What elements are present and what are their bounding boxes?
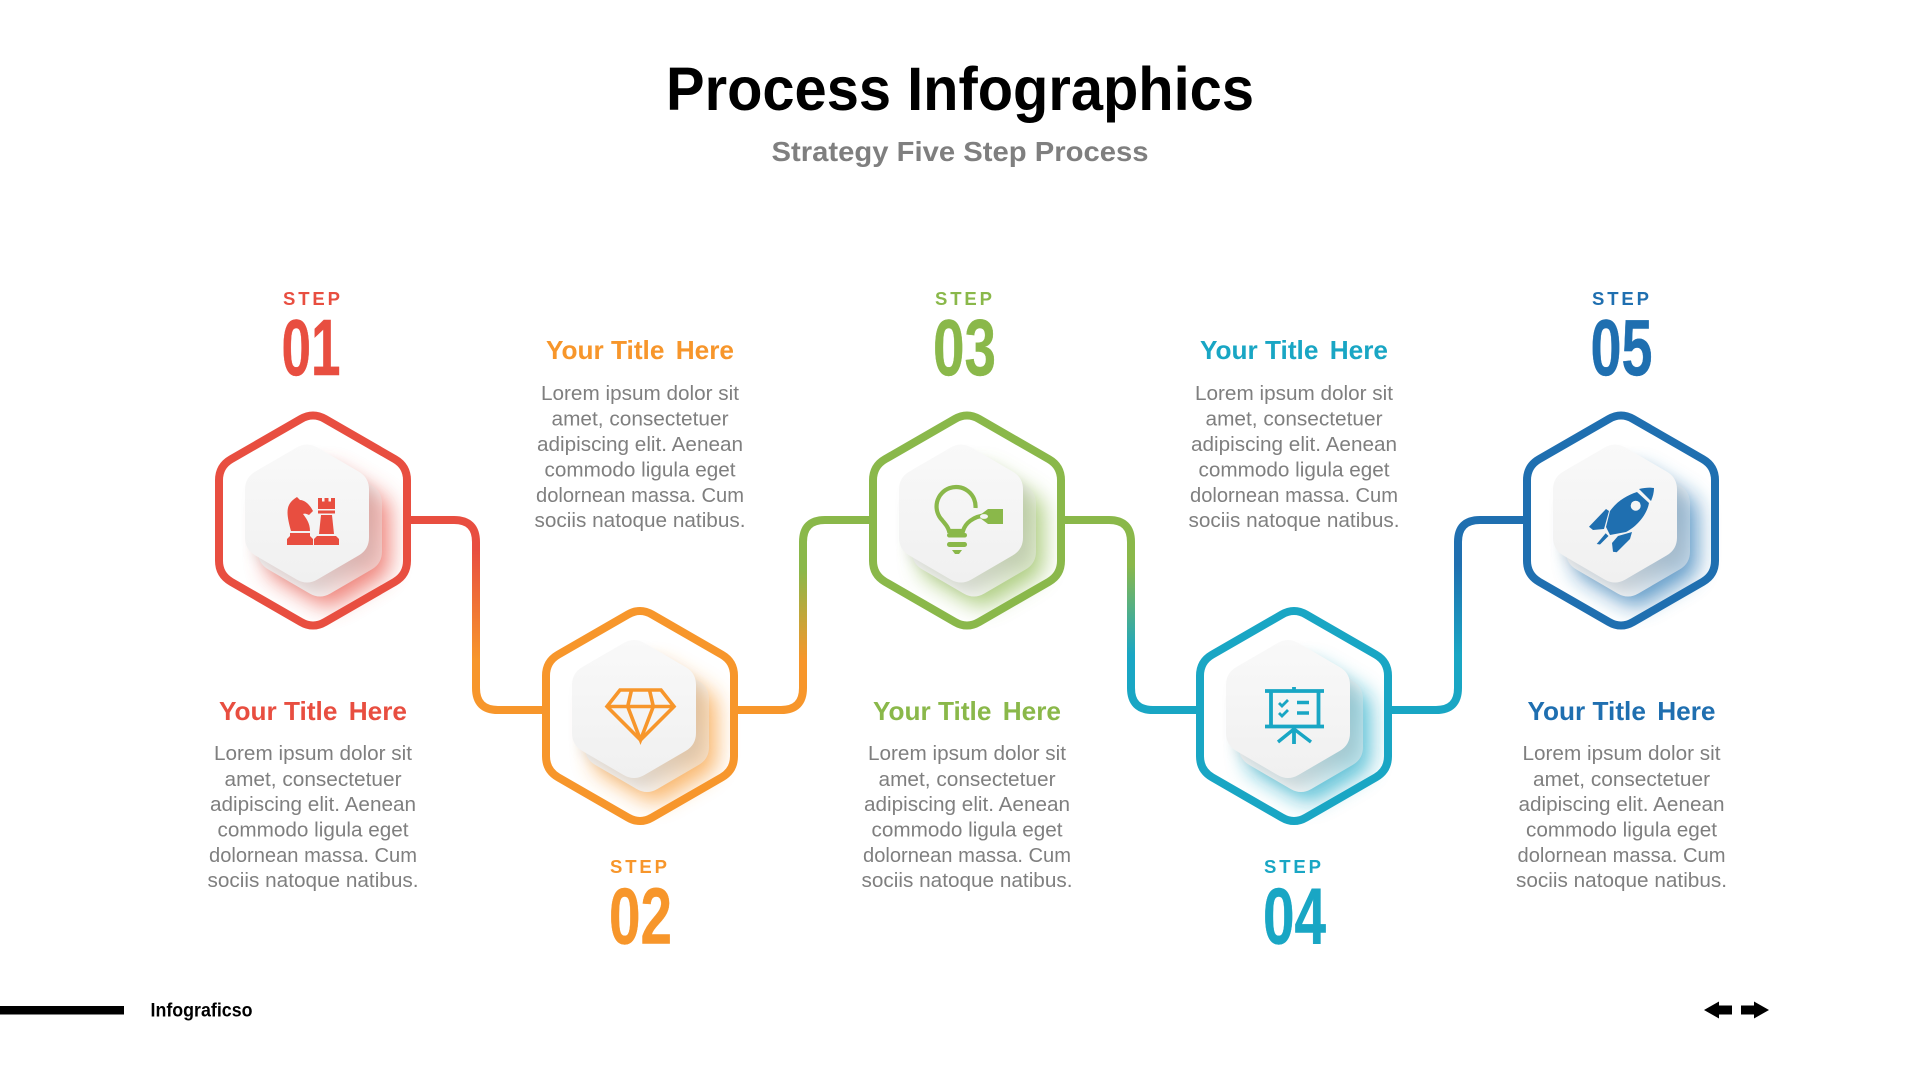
panel: step 4 xyxy=(1188,335,1400,960)
text block 4: dolornean massa. Cum xyxy=(1190,485,1398,507)
text block 4: commodo ligula eget xyxy=(1198,460,1390,482)
connector: step 1 to step 2 xyxy=(405,520,550,710)
text block 4: amet, consectetuer xyxy=(1206,408,1383,430)
hexagon 4 xyxy=(1200,611,1388,821)
icon: light bulb with tag xyxy=(937,487,1003,554)
text block 5: commodo ligula eget xyxy=(1526,820,1717,842)
text block 2: amet, consectetuer xyxy=(552,408,729,430)
panel: step 2 xyxy=(534,335,746,960)
text block 2 xyxy=(534,383,746,532)
text block 1: commodo ligula eget xyxy=(218,820,409,842)
footer brand: Infograficso xyxy=(150,1000,252,1022)
text block 1: amet, consectetuer xyxy=(224,769,402,791)
text block 1: adipiscing elit. Aenean xyxy=(210,794,416,816)
text block 3 xyxy=(862,743,1072,892)
step number 02: 02 xyxy=(609,872,672,960)
footer bar xyxy=(0,1006,124,1014)
connector: step 2 to step 3 xyxy=(730,520,875,710)
icon: rocket xyxy=(1589,488,1654,552)
text block 3: amet, consectetuer xyxy=(878,769,1056,791)
step number 03: 03 xyxy=(933,303,996,392)
step label 2: STEP xyxy=(610,856,667,877)
text block 5: amet, consectetuer xyxy=(1533,769,1710,791)
step label 1: STEP xyxy=(283,288,340,309)
text block 1 xyxy=(208,743,418,892)
hexagon 5 xyxy=(1527,416,1715,626)
heading 3: Your Title Here xyxy=(873,696,1061,726)
text block 4: adipiscing elit. Aenean xyxy=(1191,434,1397,456)
step label 3: STEP xyxy=(935,288,992,309)
text block 3: commodo ligula eget xyxy=(872,820,1063,842)
panel: step 3 xyxy=(862,288,1072,892)
icon: previous arrow xyxy=(1704,1002,1732,1018)
text block 4: Lorem ipsum dolor sit xyxy=(1195,383,1393,405)
hexagon 1 xyxy=(219,416,407,626)
step number 01: 01 xyxy=(282,303,340,392)
text block 3: Lorem ipsum dolor sit xyxy=(868,743,1066,765)
text block 1: Lorem ipsum dolor sit xyxy=(214,743,412,765)
text block 5: Lorem ipsum dolor sit xyxy=(1522,743,1721,765)
subtitle: Strategy Five Step Process xyxy=(772,136,1148,167)
panel: step 5 xyxy=(1516,288,1727,892)
text block 2: adipiscing elit. Aenean xyxy=(537,434,743,456)
text block 5: sociis natoque natibus. xyxy=(1516,870,1727,892)
connector: step 3 to step 4 xyxy=(1060,520,1205,710)
icon: diamond xyxy=(607,690,674,740)
text block 2: commodo ligula eget xyxy=(544,460,736,482)
text block 4 xyxy=(1188,383,1400,532)
text block 5 xyxy=(1516,743,1727,892)
text block 3: dolornean massa. Cum xyxy=(863,845,1071,867)
title: Process Infographics xyxy=(666,55,1254,123)
connector: step 4 to step 5 xyxy=(1385,520,1530,710)
heading 5: Your Title Here xyxy=(1528,696,1716,726)
step label 4: STEP xyxy=(1264,856,1321,877)
heading 2: Your Title Here xyxy=(546,335,734,365)
icon: chess pieces xyxy=(287,497,339,545)
text block 1: sociis natoque natibus. xyxy=(208,870,418,892)
text block 1: dolornean massa. Cum xyxy=(209,845,417,867)
step number 04: 04 xyxy=(1263,872,1326,960)
icon: next arrow xyxy=(1741,1002,1769,1018)
icon: presentation board xyxy=(1265,687,1324,744)
text block 5: dolornean massa. Cum xyxy=(1518,845,1726,867)
text block 3: adipiscing elit. Aenean xyxy=(864,794,1070,816)
heading 4: Your Title Here xyxy=(1200,335,1388,365)
step number 05: 05 xyxy=(1590,303,1652,392)
text block 3: sociis natoque natibus. xyxy=(862,870,1072,892)
hexagon 2 xyxy=(546,611,734,821)
text block 2: sociis natoque natibus. xyxy=(534,510,746,532)
text block 2: Lorem ipsum dolor sit xyxy=(541,383,739,405)
heading 1: Your Title Here xyxy=(219,696,407,726)
text block 5: adipiscing elit. Aenean xyxy=(1518,794,1724,816)
panel: step 1 xyxy=(208,288,418,892)
text block 4: sociis natoque natibus. xyxy=(1188,510,1400,532)
text block 2: dolornean massa. Cum xyxy=(536,485,744,507)
hexagon 3 xyxy=(873,416,1061,626)
step label 5: STEP xyxy=(1592,288,1649,309)
